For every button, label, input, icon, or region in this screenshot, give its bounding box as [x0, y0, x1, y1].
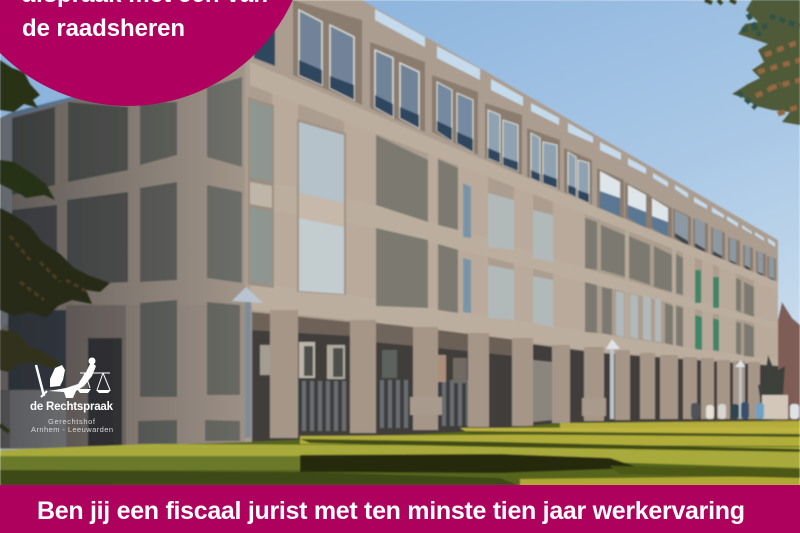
lawn base — [0, 420, 800, 486]
icon: justice figure with sword and scales — [36, 358, 111, 398]
people on the square — [691, 402, 799, 419]
neighbouring brick building — [778, 302, 800, 425]
logo: de Rechtspraak — [30, 358, 114, 434]
banner text: Ben jij een fiscaal jurist met ten minste tien jaar werkervaring — [37, 497, 745, 525]
banner background — [0, 485, 800, 533]
parapet openings — [375, 9, 775, 247]
upper branch — [0, 60, 40, 112]
lawn and hedges — [0, 420, 800, 486]
upper floor piers — [272, 72, 778, 366]
bottom banner — [0, 485, 800, 533]
logo subtitle: Arnhem - Leeuwarden — [31, 425, 113, 434]
callout circle — [0, 0, 309, 106]
statue and pedestal — [758, 355, 788, 419]
callout text: de raadsheren — [22, 15, 185, 42]
left wing facade — [0, 36, 255, 449]
main mass — [0, 208, 110, 318]
ground floor interior — [250, 312, 778, 442]
hedge shadows — [460, 431, 800, 437]
tree: left foliage — [0, 60, 110, 432]
brown leaves — [10, 236, 88, 300]
middle branch — [0, 160, 55, 200]
horizontal floor bands — [250, 62, 778, 365]
top floor windows — [254, 10, 774, 283]
top floor recess shadows — [293, 0, 776, 285]
lower branch — [0, 330, 64, 372]
grey stone panels — [12, 77, 754, 357]
circle background — [0, 0, 309, 106]
foliage mass — [732, 0, 800, 125]
logo subtitle: Gerechtshof — [48, 417, 96, 426]
green windows — [695, 270, 719, 351]
pale side wall — [0, 112, 12, 330]
logo wordmark: de Rechtspraak — [30, 401, 114, 413]
left wing base — [0, 300, 252, 448]
lamp posts — [232, 287, 745, 438]
logo subtitle — [31, 417, 113, 434]
tree: top right foliage — [705, 0, 800, 125]
ground floor piers — [270, 310, 760, 438]
tall windows — [248, 97, 661, 342]
shadow over left wing — [0, 50, 245, 449]
callout text — [22, 0, 268, 42]
hedge rows bright — [560, 421, 800, 430]
right wing facade — [250, 0, 778, 442]
